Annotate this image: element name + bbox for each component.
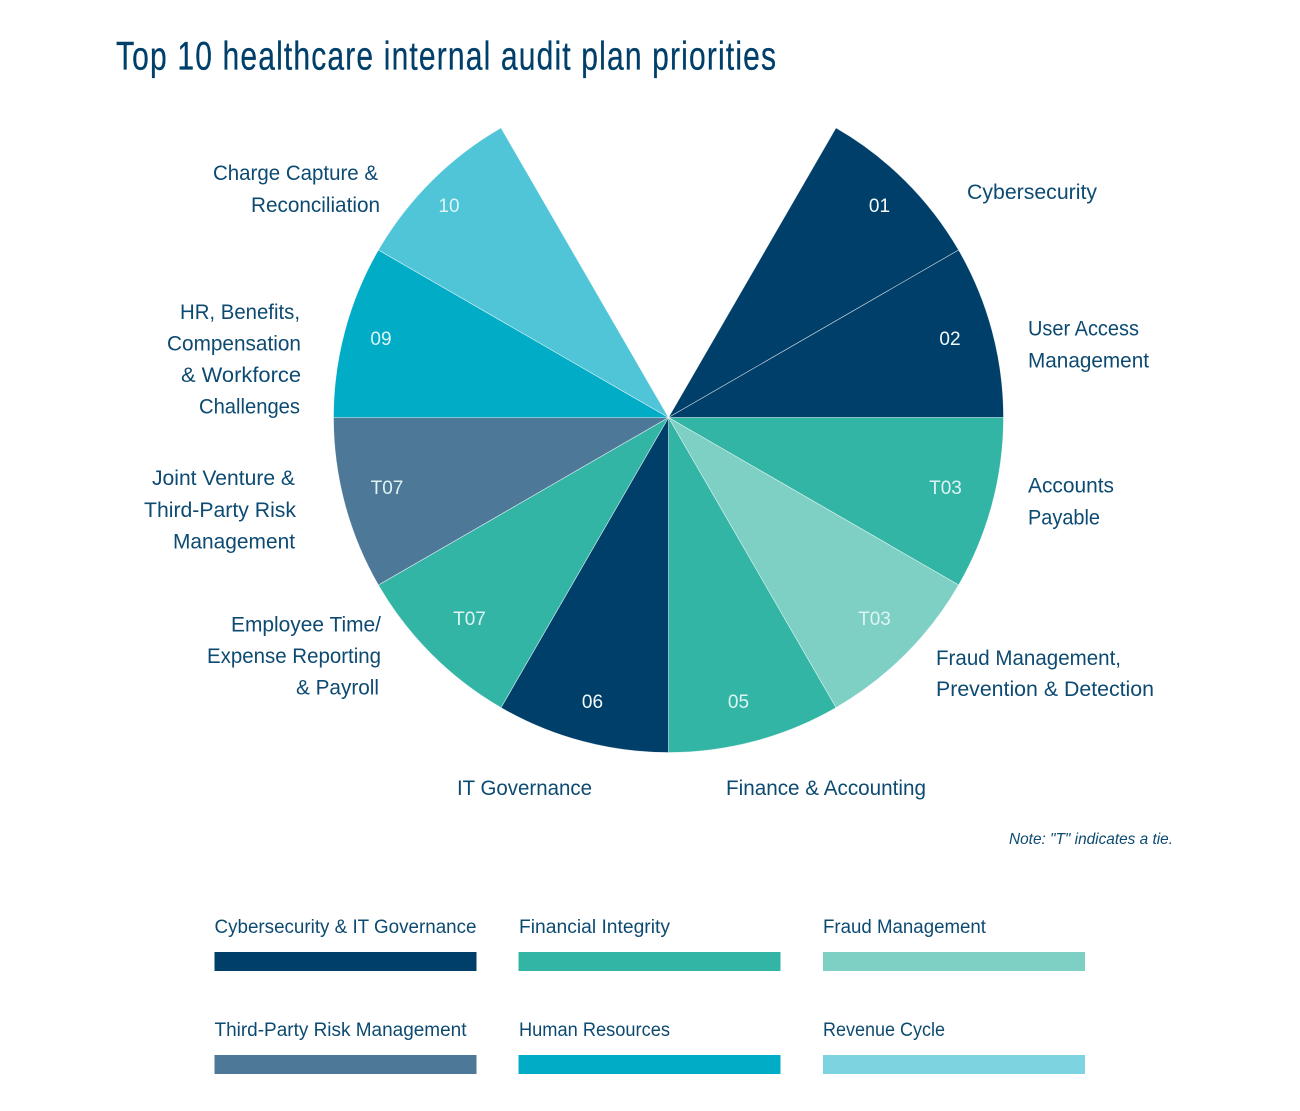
wedge numbers: 05 xyxy=(728,692,749,713)
wedge numbers: 02 xyxy=(939,329,961,350)
legend item: Cybersecurity and IT Governance xyxy=(214,917,476,971)
label: Joint Venture xyxy=(144,467,296,554)
label: HR: & Workforce xyxy=(181,364,301,387)
label: Joint Venture: Management xyxy=(173,530,295,554)
wedge numbers: 01 xyxy=(869,196,890,217)
wedge 02 User Access Management xyxy=(668,250,1004,418)
wedge numbers: 10 xyxy=(438,196,460,217)
legend item: Human Resources: Human Resources xyxy=(519,1020,670,1041)
wedge 10 Charge Capture xyxy=(378,128,668,418)
label: Finance and Accounting: Finance & Accounting xyxy=(726,777,926,800)
wedge numbers: T03 xyxy=(929,478,962,499)
label: IT Governance: IT Governance xyxy=(457,777,592,800)
wedge numbers: 06 xyxy=(582,692,603,713)
wedge T07 Joint Venture xyxy=(334,418,668,585)
wedge T03 Accounts Payable xyxy=(668,418,1004,585)
title: Top 10 healthcare internal audit plan priorities xyxy=(116,34,776,79)
label: Accounts Payable: Payable xyxy=(1028,506,1100,530)
wedge numbers xyxy=(370,196,962,713)
legend item: Fraud Management: Fraud Management xyxy=(823,917,987,938)
legend item: Fraud Management xyxy=(823,917,1085,971)
wedge 09 HR xyxy=(334,250,668,418)
wedge T03 Fraud Management xyxy=(668,418,959,708)
label: Fraud Management xyxy=(936,647,1154,701)
label: Employee Time xyxy=(207,614,381,700)
label: HR: HR, Benefits, xyxy=(180,301,300,324)
label: Fraud Management: Prevention & Detection xyxy=(936,678,1154,701)
label: Accounts Payable xyxy=(1028,474,1114,530)
note: Note: "T" indicates a tie. xyxy=(1009,831,1173,848)
label: Fraud Management: Fraud Management, xyxy=(936,647,1121,670)
label: HR xyxy=(167,301,301,418)
label: Charge Capture xyxy=(213,162,380,217)
wedge 06 IT Governance xyxy=(501,418,668,752)
label: User Access Management: User Access xyxy=(1028,318,1139,340)
legend xyxy=(214,917,1085,1074)
label: User Access Management xyxy=(1028,318,1149,372)
label: HR: Challenges xyxy=(199,396,300,418)
label: Employee Time: Expense Reporting xyxy=(207,645,381,668)
legend item: Human Resources xyxy=(518,1020,780,1074)
label: Employee Time: & Payroll xyxy=(296,676,379,700)
legend item: Third-Party Risk Management xyxy=(214,1020,476,1074)
label: HR: Compensation xyxy=(167,332,301,356)
pie chart xyxy=(334,128,1004,752)
wedge numbers: 09 xyxy=(370,329,392,350)
legend item: Revenue Cycle xyxy=(823,1020,1085,1074)
wedge T07 Employee Time xyxy=(378,418,668,708)
wedge numbers: T03 xyxy=(858,609,891,630)
label: Employee Time: Employee Time/ xyxy=(231,614,381,636)
label: Charge Capture: Reconciliation xyxy=(251,194,380,217)
label: Joint Venture: Joint Venture & xyxy=(152,467,295,490)
legend item: Third-Party Risk Management: Third-Party Risk Management xyxy=(214,1020,467,1041)
legend item: Financial Integrity: Financial Integrity xyxy=(519,917,671,938)
label: User Access Management: Management xyxy=(1028,350,1149,372)
label: Cybersecurity: Cybersecurity xyxy=(967,181,1097,204)
wedge 01 Cybersecurity xyxy=(668,128,959,418)
label: Joint Venture: Third-Party Risk xyxy=(144,499,296,522)
legend item: Financial Integrity xyxy=(518,917,780,971)
legend item: Revenue Cycle: Revenue Cycle xyxy=(823,1020,945,1041)
label: Accounts Payable: Accounts xyxy=(1028,474,1114,498)
label: Charge Capture: Charge Capture & xyxy=(213,162,378,185)
wedge 05 Finance and Accounting xyxy=(668,418,836,752)
legend item: Cybersecurity and IT Governance: Cybersecurity & IT Governance xyxy=(214,917,476,938)
wedge numbers: T07 xyxy=(371,478,403,499)
wedge numbers: T07 xyxy=(453,609,486,630)
